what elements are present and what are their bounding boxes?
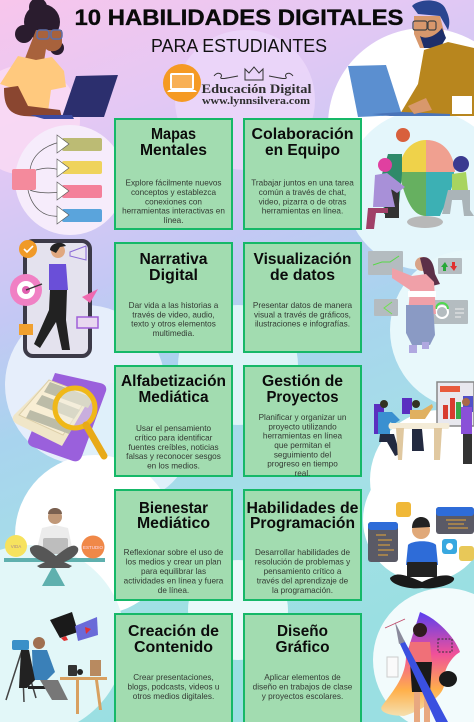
card: Visualización de datos: ilustraciones e infografías. bbox=[255, 320, 350, 329]
card: Colaboración en Equipo: herramientas en línea. bbox=[262, 207, 343, 216]
logo: Educación Digital bbox=[163, 64, 312, 107]
card: Gestión de Proyectos: Planificar y organizar un bbox=[259, 413, 347, 422]
card: Mapas Mentales: conceptos y establezca bbox=[131, 188, 217, 197]
card: Alfabetización Mediática: Alfabetización bbox=[121, 373, 226, 390]
card: Habilidades de Programación: resolución de problemas y bbox=[255, 558, 351, 566]
card: Colaboración en Equipo: común a través de chat, bbox=[259, 188, 346, 197]
card: Mapas Mentales: Mapas bbox=[151, 126, 196, 143]
card: Alfabetización Mediática: Usar el pensamiento bbox=[136, 424, 211, 433]
card: Visualización de datos: Presentar datos de manera bbox=[253, 301, 353, 310]
icon: storyteller with phone bbox=[10, 240, 98, 356]
card: Colaboración en Equipo: Colaboración bbox=[252, 126, 354, 143]
card: Narrativa Digital: Narrativa bbox=[140, 251, 208, 268]
card: Alfabetización Mediática: fuentes creíbles, noticias bbox=[128, 443, 219, 452]
card: Bienestar Mediático: Mediático bbox=[137, 515, 210, 532]
card: Gestión de Proyectos: herramientas en línea bbox=[263, 432, 343, 441]
card: Habilidades de Programación: Desarrollar habilidades de bbox=[255, 548, 351, 557]
card: Mapas Mentales: Explore fácilmente nuevos bbox=[125, 178, 222, 188]
card: Habilidades de Programación: Programación bbox=[250, 515, 355, 532]
icon: graphic design bbox=[381, 612, 460, 722]
card: Bienestar Mediático: de línea. bbox=[158, 586, 189, 595]
card: Creación de Contenido: otros medios digitales. bbox=[133, 692, 214, 701]
card: Visualización de datos: visual a través de gráficos, bbox=[254, 310, 351, 319]
card: Habilidades de Programación: través del aprendizaje de bbox=[257, 576, 349, 585]
card: Diseño Gráfico bbox=[244, 614, 361, 722]
card: Visualización de datos: de datos bbox=[270, 267, 335, 284]
card: Gestión de Proyectos: Gestión de bbox=[262, 373, 343, 390]
card: Diseño Gráfico: Gráfico bbox=[276, 639, 330, 656]
title: 10 HABILIDADES DIGITALES bbox=[74, 5, 404, 30]
card: Gestión de Proyectos: Proyectos bbox=[266, 389, 338, 406]
card: Colaboración en Equipo: en Equipo bbox=[265, 142, 340, 159]
card: Visualización de datos bbox=[244, 243, 361, 352]
illustration: woman with laptop bbox=[0, 0, 118, 119]
card: Creación de Contenido: Creación de bbox=[128, 623, 219, 640]
card: Colaboración en Equipo: video, pizarra o de otras bbox=[259, 197, 346, 206]
card: Mapas Mentales: conexiones con bbox=[145, 197, 202, 206]
icon: document with magnifier bbox=[13, 373, 106, 461]
card: Diseño Gráfico: diseño en trabajos de clase bbox=[253, 682, 353, 692]
icon: team puzzle bbox=[366, 128, 474, 229]
card: Colaboración en Equipo: Trabajar juntos en una tarea bbox=[251, 178, 354, 188]
card: Narrativa Digital: multimedia. bbox=[153, 329, 194, 338]
logo: Educación Digital: www.lynnsilvera.com bbox=[202, 96, 310, 107]
card: Creación de Contenido bbox=[115, 614, 232, 722]
card: Colaboración en Equipo bbox=[244, 119, 361, 229]
card: Diseño Gráfico: y proyectos escolares. bbox=[262, 692, 343, 701]
card: Visualización de datos: Visualización bbox=[254, 251, 352, 268]
icon: content creator bbox=[6, 612, 107, 714]
card: Creación de Contenido: Contenido bbox=[134, 639, 213, 656]
card: Gestión de Proyectos bbox=[244, 366, 361, 478]
card: Gestión de Proyectos: progreso en tiempo bbox=[267, 460, 338, 469]
card: Narrativa Digital bbox=[115, 243, 232, 352]
card: Narrativa Digital: texto y otros elementos bbox=[131, 320, 216, 329]
card: Habilidades de Programación: Habilidades de bbox=[246, 500, 359, 517]
card: Narrativa Digital: través de video, audio, bbox=[132, 310, 215, 319]
card: Alfabetización Mediática: falsas y reconocer sesgos bbox=[126, 452, 221, 461]
card: Diseño Gráfico: Aplicar elementos de bbox=[264, 673, 341, 682]
card: Habilidades de Programación: pensamiento crítico a bbox=[264, 567, 342, 576]
icon: data visualization person bbox=[368, 251, 468, 353]
card: Alfabetización Mediática: crítico para identificar bbox=[135, 433, 213, 442]
card: Bienestar Mediático: actividades en línea y fuera bbox=[124, 576, 224, 585]
card: Gestión de Proyectos: que permitan el bbox=[274, 441, 331, 450]
card: Gestión de Proyectos: seguimiento del bbox=[274, 450, 331, 459]
icon: mind map bbox=[12, 135, 102, 224]
icon: balance life and study: VIDA bbox=[11, 544, 21, 549]
card: Bienestar Mediático: Bienestar bbox=[139, 500, 208, 517]
card: Alfabetización Mediática: Mediática bbox=[138, 389, 209, 406]
icon: programmer bbox=[368, 502, 474, 588]
card: Mapas Mentales: herramientas interactivas en bbox=[122, 207, 225, 216]
card: Alfabetización Mediática: en los medios. bbox=[147, 462, 200, 470]
card: Habilidades de Programación: la programación. bbox=[272, 586, 333, 595]
card: Mapas Mentales: línea. bbox=[163, 216, 184, 225]
card: Creación de Contenido: blogs, podcasts, videos u bbox=[128, 682, 220, 692]
title bbox=[74, 5, 404, 56]
card: Gestión de Proyectos: real. bbox=[295, 469, 310, 478]
card: Gestión de Proyectos: proyecto utilizando bbox=[268, 422, 337, 431]
card: Creación de Contenido: Crear presentaciones, bbox=[133, 673, 214, 682]
card: Bienestar Mediático: Reflexionar sobre el uso de bbox=[124, 548, 224, 557]
card: Diseño Gráfico: Diseño bbox=[277, 623, 328, 640]
card: Mapas Mentales: Mentales bbox=[140, 142, 207, 159]
card: Habilidades de Programación bbox=[244, 490, 361, 600]
card: Bienestar Mediático: para equilibrar las bbox=[141, 567, 206, 576]
subtitle: PARA ESTUDIANTES bbox=[151, 35, 327, 56]
illustration: man with laptop bbox=[348, 0, 474, 117]
card: Mapas Mentales bbox=[115, 119, 232, 229]
icon: project meeting bbox=[374, 382, 474, 464]
card: Narrativa Digital: Digital bbox=[149, 267, 198, 284]
logo: Educación Digital: Educación Digital bbox=[202, 81, 312, 96]
icon: balance life and study: ESTUDIO bbox=[83, 545, 103, 550]
icon: balance life and study bbox=[4, 508, 105, 586]
card: Bienestar Mediático: los medios y crear un plan bbox=[126, 558, 222, 566]
card: Alfabetización Mediática bbox=[115, 366, 232, 476]
card: Bienestar Mediático bbox=[115, 490, 232, 600]
card: Narrativa Digital: Dar vida a las historias a bbox=[129, 301, 219, 310]
